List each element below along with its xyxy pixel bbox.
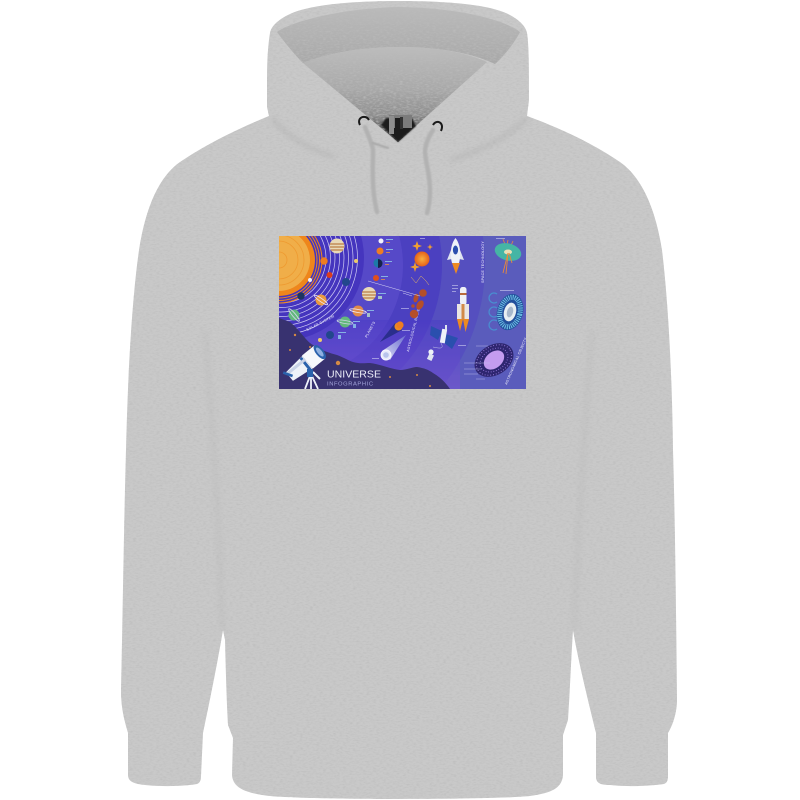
title: INFOGRAPHIC [327, 381, 373, 387]
sleeve seam shading [205, 330, 592, 630]
blue arc icons [489, 293, 497, 330]
section label: planets: PLANETS [364, 320, 377, 338]
hoodie product image with printed infographic [121, 1, 677, 799]
astronaut [427, 343, 442, 361]
left drawstring [365, 127, 388, 212]
constellation [411, 276, 429, 285]
solar system planets [288, 238, 358, 322]
hood fold shading [272, 118, 527, 160]
nebula [474, 343, 514, 377]
hill stars [289, 334, 431, 387]
tiny caption bars [372, 238, 514, 359]
right eyelet [433, 122, 442, 131]
asteroids [396, 289, 427, 329]
planet data labels [338, 239, 393, 339]
section label: solar system: SOLAR SYSTEM [306, 314, 335, 332]
neck label [381, 115, 416, 142]
sun [279, 236, 322, 304]
rocket two [457, 287, 469, 332]
hood interior [303, 47, 487, 142]
rocket one [447, 238, 464, 274]
hood back [277, 7, 520, 64]
nebula callout lines [464, 346, 490, 379]
satellite [430, 325, 458, 349]
section label: astrological bodies: ASTROLOGICAL BODIES [406, 305, 421, 352]
printed infographic [279, 236, 526, 389]
small comet [380, 322, 402, 342]
dark hill landscape [279, 318, 450, 389]
hoodie body and sleeves [121, 1, 677, 799]
left eyelet [359, 117, 369, 125]
title: UNIVERSE [327, 368, 381, 380]
white connector lines [368, 281, 420, 296]
planets column [318, 238, 384, 342]
wormhole disc [494, 238, 522, 274]
spiral galaxy [496, 294, 524, 330]
large comet [381, 335, 406, 360]
stars and orange star [410, 241, 433, 272]
orbit rings [279, 236, 358, 332]
title [328, 370, 381, 386]
section label: astronomical objects: ASTRONOMICAL OBJECTS [504, 336, 528, 385]
section label: space technology: SPACE TECHNOLOGY [481, 241, 485, 283]
telescope [283, 343, 328, 389]
right drawstring [425, 130, 433, 213]
